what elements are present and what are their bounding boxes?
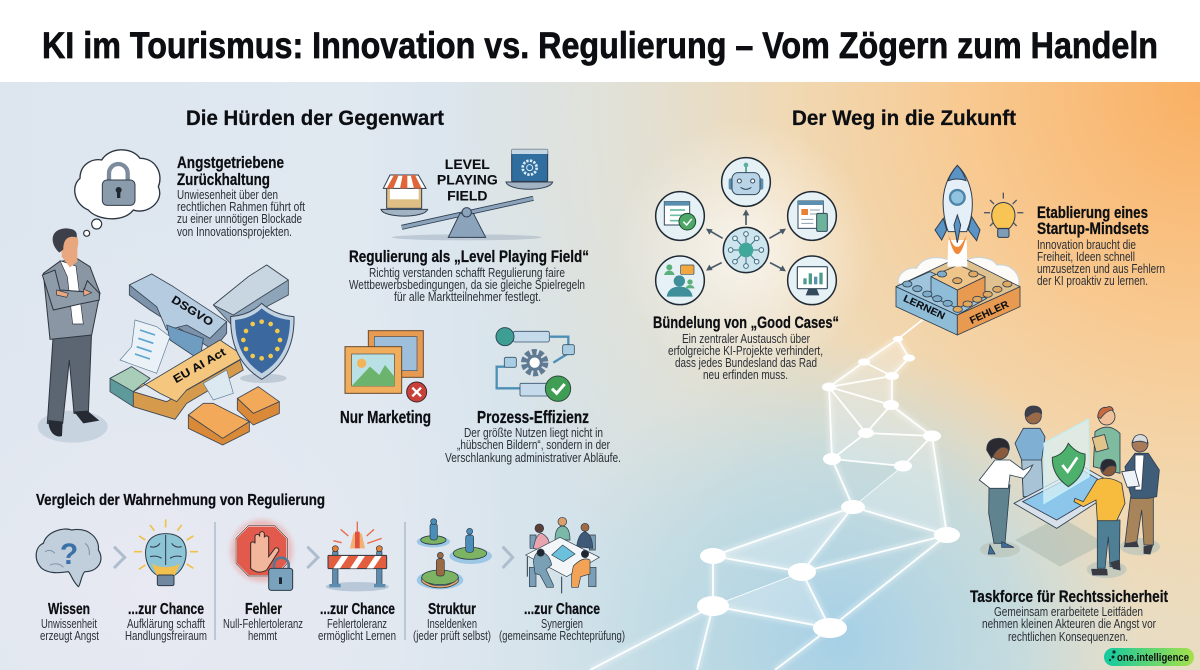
- heading: Etablierung eines Startup-Mindsets: [1037, 204, 1149, 238]
- panel: only marketing: [340, 331, 431, 427]
- text block: good cases description: [668, 332, 823, 382]
- label: Fehler: Null-Fehlertoleranz: [223, 617, 303, 631]
- illustration: tablet: [1014, 467, 1120, 528]
- figure: man back left: [1015, 406, 1045, 497]
- label: Wissen: erzeugt Angst: [40, 629, 99, 643]
- text block: efficiency description: „hübschen Bildern“, sondern in der: [457, 438, 610, 452]
- label: zur Chance 2: [318, 601, 396, 643]
- label: Wissen: Unwissenheit: [41, 617, 97, 631]
- label: zur Chance 2: ...zur Chance: [320, 601, 395, 618]
- text block: regulation description: Richtig verstanden schafft Regulierung faire: [369, 266, 565, 280]
- text block: taskforce description: rechtlichen Konsequenzen.: [1008, 630, 1128, 644]
- icon: document and phone: [798, 201, 827, 231]
- icon: balance scale: LEVEL: [445, 156, 490, 172]
- text block: regulation description: für alle Marktteilnehmer festlegt.: [394, 290, 541, 304]
- label: Struktur: [413, 601, 491, 643]
- heading: comparison: Vergleich der Wahrnehmung von Regulierung: [36, 492, 325, 509]
- icon: picture frames with cross: [345, 331, 427, 402]
- icon: isolated islands: [417, 519, 492, 589]
- network path graphic: [590, 310, 960, 670]
- text block: fear description: von Innovationsprojekten.: [177, 225, 292, 239]
- icon: checklist window: [664, 202, 696, 230]
- logo: one.intelligence: one.intelligence: [1117, 652, 1189, 664]
- text block: fear description: [177, 188, 305, 239]
- figure: woman back right: [1092, 407, 1120, 473]
- label: zur Chance 3: ...zur Chance: [524, 601, 600, 618]
- icon: chart monitor: [797, 267, 827, 295]
- heading: left section: Die Hürden der Gegenwart: [186, 107, 444, 130]
- text block: fear description: rechtlichen Rahmen führt oft: [177, 200, 305, 214]
- illustration: rocket on bricks: FEHLER: [968, 299, 1011, 327]
- text block: regulation description: Wettbewerbsbedingungen, da sie gleiche Spielregeln: [349, 278, 585, 292]
- label: Struktur: Inseldenken: [427, 617, 477, 631]
- illustration: man with thought bubble and puzzle: DSGVO: [169, 294, 215, 329]
- label: zur Chance 1: ...zur Chance: [128, 601, 204, 618]
- icon: lightbulb: [984, 193, 1023, 237]
- panel: taskforce: [970, 406, 1168, 644]
- label: zur Chance 1: Handlungsfreiraum: [125, 629, 207, 643]
- icon: thought bubble with lock: [75, 150, 160, 236]
- text block: good cases description: erfolgreiche KI-Projekte verhindert,: [668, 344, 823, 358]
- icon: chevron: [307, 547, 318, 568]
- text block: good cases description: neu erfinden muss.: [703, 368, 788, 382]
- heading: Regulierung als Level Playing Field: Regulierung als „Level Playing Field“: [349, 248, 589, 266]
- icon group: comparison row left: [36, 519, 318, 590]
- heading: Prozess-Effizienz: Prozess-Effizienz: [477, 407, 589, 427]
- divider: [215, 522, 405, 640]
- icon: lightbulb brain: [134, 519, 198, 586]
- icon: stop sign with hand and lock: [231, 520, 293, 590]
- illustration: bricks: [896, 257, 1020, 335]
- heading: Etablierung eines Startup-Mindsets: Etablierung eines: [1037, 204, 1148, 222]
- text block: startup description: Freiheit, Ideen schnell: [1037, 250, 1135, 264]
- text block: startup description: umzusetzen und aus Fehlern: [1037, 262, 1165, 276]
- icon: balance scale: [381, 149, 553, 240]
- panel: startup mindset: [896, 165, 1165, 335]
- text block: taskforce description: nehmen kleinen Akteuren die Angst vor: [982, 617, 1156, 631]
- text block: taskforce description: Gemeinsam erarbeitete Leitfäden: [994, 605, 1143, 619]
- icon: chevron: [503, 547, 513, 568]
- heading: Angstgetriebene Zurückhaltung: Angstgetriebene: [177, 154, 284, 172]
- figure: thinking man: [38, 228, 108, 443]
- label: Fehler: [223, 601, 303, 643]
- label: zur Chance 2: Fehlertoleranz: [327, 617, 387, 631]
- text block: good cases description: Ein zentraler Austausch über: [682, 332, 810, 346]
- label: Struktur: Struktur: [428, 601, 476, 618]
- icon: brain with question mark: [36, 529, 101, 587]
- panel: fear-driven restraint: [38, 150, 305, 445]
- label: zur Chance 1: [125, 601, 207, 643]
- illustration: man with thought bubble and puzzle: EU AI Act: [171, 346, 228, 386]
- icon group: comparison row right: [326, 517, 599, 593]
- heading: right section: Der Weg in die Zukunft: [792, 107, 1016, 130]
- illustration: smoke clouds: [898, 258, 1019, 307]
- text block: regulation description: [349, 266, 585, 304]
- icon: hub network: [656, 158, 836, 305]
- text block: fear description: Unwiesenheit über den: [177, 188, 278, 202]
- illustration: regulation puzzle: [110, 265, 288, 445]
- icon: balance scale: FIELD: [447, 188, 488, 204]
- panel: good cases: [653, 158, 839, 382]
- icon: barrier with warning light: [326, 522, 389, 591]
- label: zur Chance 1: Aufklärung schafft: [127, 617, 205, 631]
- illustration: team around tablet with shield: [979, 406, 1160, 578]
- text block: startup description: der KI proaktiv zu lernen.: [1037, 274, 1148, 288]
- logo: one.intelligence: [1104, 648, 1194, 666]
- heading: Angstgetriebene Zurückhaltung: [177, 154, 284, 189]
- illustration: man with thought bubble and puzzle: [38, 150, 294, 445]
- title band: [0, 0, 1200, 82]
- label: Fehler: hemmt: [248, 629, 277, 643]
- label: zur Chance 3: (gemeinsame Rechteprüfung): [499, 629, 625, 643]
- icon: chevron: [114, 547, 125, 568]
- text block: efficiency description: Verschlankung administrativer Abläufe.: [445, 451, 621, 465]
- icon: hub: [728, 232, 764, 268]
- text block: startup description: Innovation braucht die: [1037, 238, 1136, 252]
- text block: efficiency description: Der größte Nutzen liegt nicht in: [464, 426, 603, 440]
- figure: woman left: [979, 438, 1033, 554]
- text block: taskforce description: [982, 605, 1156, 644]
- icon: team around table: [526, 517, 599, 593]
- label: Wissen: Wissen: [48, 601, 90, 618]
- heading: Angstgetriebene Zurückhaltung: Zurückhaltung: [177, 171, 270, 189]
- figure: older man right: [1122, 435, 1159, 554]
- icon: balance scale: PLAYING: [437, 172, 498, 188]
- icon: workflow gear: [496, 328, 574, 401]
- label: Wissen: [40, 601, 99, 643]
- figure: man in yellow sweater: [1074, 459, 1125, 575]
- heading: Etablierung eines Startup-Mindsets: Startup-Mindsets: [1037, 220, 1149, 238]
- illustration: rocket on bricks: [896, 165, 1023, 335]
- icon: brain with question mark: ?: [60, 538, 78, 571]
- panel: process efficiency: [445, 328, 621, 465]
- panel: perception comparison: [36, 492, 625, 643]
- illustration: holographic panel: [1044, 419, 1089, 503]
- text block: good cases description: dass jedes Bundesland das Rad: [675, 356, 817, 370]
- label: zur Chance 3: [499, 601, 625, 643]
- icon: robot: [729, 163, 763, 195]
- icon: rocket: [935, 165, 980, 267]
- label: Struktur: (jeder prüft selbst): [413, 629, 491, 643]
- illustration: rocket on bricks: LERNEN: [901, 293, 947, 322]
- label: zur Chance 2: ermöglicht Lernen: [318, 629, 396, 643]
- heading: Nur Marketing: Nur Marketing: [340, 407, 431, 427]
- text block: efficiency description: [445, 426, 621, 465]
- icon: shield check: [1052, 443, 1085, 487]
- label: zur Chance 3: Synergien: [541, 617, 583, 631]
- icon: EU shield: [231, 303, 294, 379]
- text block: fear description: zu einer unnötigen Blockade: [177, 212, 302, 226]
- text block: startup description: [1037, 238, 1165, 288]
- label: Fehler: Fehler: [245, 601, 282, 618]
- panel: level playing field: [349, 149, 589, 304]
- icon: people chat: [664, 264, 695, 297]
- heading: Bündelung von Good Cases: Bündelung von „Good Cases“: [653, 313, 839, 332]
